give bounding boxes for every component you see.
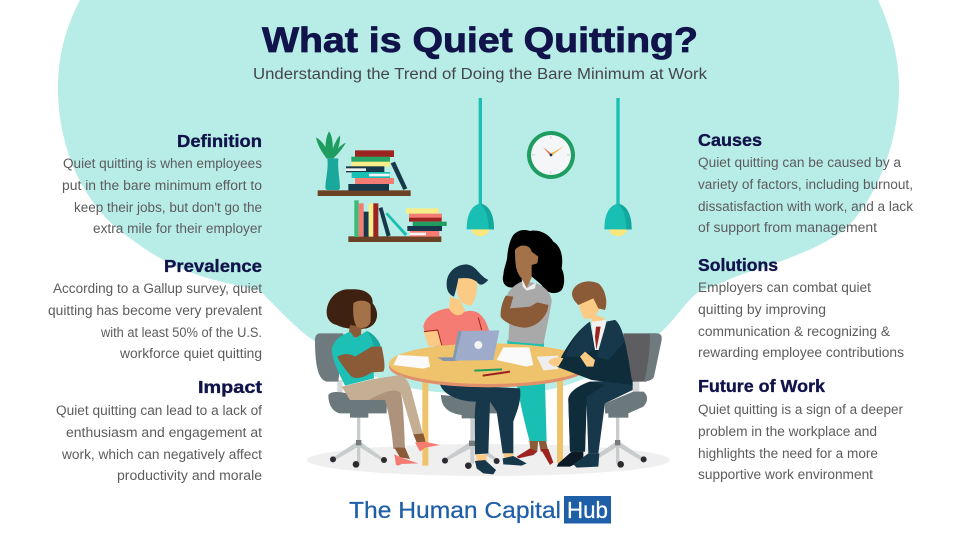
panel: solutions: Employers can combat quiet (698, 280, 871, 295)
seated man in suit (548, 281, 633, 468)
panel: impact (56, 377, 262, 483)
icon: right pendant lamp (604, 98, 632, 236)
panel: definition: Quiet quitting is when employees (63, 156, 262, 171)
middle chair (441, 395, 503, 469)
logo: The Human Capital Hub: The Human Capital (349, 497, 561, 523)
icon: laptop (437, 330, 499, 361)
icon: left pendant lamp (467, 98, 494, 236)
team meeting illustration (307, 230, 670, 476)
round table (389, 343, 588, 466)
title: What is Quiet Quitting? (262, 21, 698, 60)
floor shadow (307, 444, 670, 476)
panel: causes: dissatisfaction with work, and a lack (698, 199, 913, 214)
icon: plant in vase (316, 131, 346, 190)
logo: The Human Capital Hub: Hub (567, 497, 608, 523)
panel: prevalence: workforce quiet quitting (119, 346, 262, 361)
seated man in coral shirt (423, 264, 527, 474)
panel: future of work: Quiet quitting is a sign of a deeper (698, 402, 903, 417)
panel: prevalence: Prevalence (164, 256, 262, 276)
panel: future of work: supportive work environment (698, 467, 873, 482)
panel: future of work (698, 376, 903, 482)
panel: definition: Definition (177, 131, 262, 151)
panel: future of work: highlights the need for a more (698, 446, 878, 461)
top shelf with books (318, 150, 411, 196)
panel: impact: productivity and morale (117, 468, 262, 483)
left chair (315, 333, 387, 468)
subtitle: Understanding the Trend of Doing the Bare Minimum at Work (253, 66, 707, 83)
panel: impact: Quiet quitting can lead to a lack of (56, 403, 262, 418)
panel: definition: put in the bare minimum effort to (62, 178, 262, 193)
panel: solutions: communication & recognizing & (698, 324, 890, 339)
panel: causes: of support from management (698, 220, 877, 235)
panel: solutions (698, 255, 904, 360)
panel: prevalence: According to a Gallup survey, quiet (53, 281, 262, 296)
background teal blob (58, 0, 899, 394)
panel: causes (698, 130, 913, 235)
papers and pencils on table (393, 347, 558, 376)
panel: definition: keep their jobs, but don't go the (74, 200, 262, 215)
panel: definition (62, 131, 263, 236)
panel: solutions: Solutions (698, 255, 778, 275)
panel: causes: Quiet quitting can be caused by a (698, 155, 901, 170)
panel: future of work: problem in the workplace and (698, 424, 877, 439)
right chair (597, 333, 662, 468)
panel: impact: Impact (198, 377, 262, 397)
panel: prevalence (48, 256, 262, 361)
panel: solutions: rewarding employee contributions (698, 345, 904, 360)
panel: prevalence: with at least 50% of the U.S. (100, 325, 262, 340)
bottom shelf with books (348, 200, 447, 242)
panel: causes: Causes (698, 130, 762, 150)
panel: impact: work, which can negatively affect (61, 447, 262, 462)
icon: wall clock (527, 131, 575, 179)
seated woman with crossed arms (327, 289, 440, 466)
panel: definition: extra mile for their employer (93, 221, 263, 236)
panel: impact: enthusiasm and engagement at (66, 425, 262, 440)
panel: solutions: quitting by improving (698, 302, 826, 317)
standing woman (501, 230, 564, 465)
panel: prevalence: quitting has become very prevalent (48, 303, 262, 318)
panel: causes: variety of factors, including burnout, (698, 177, 913, 192)
wall decor illustration (316, 98, 632, 242)
panel: future of work: Future of Work (698, 376, 825, 396)
